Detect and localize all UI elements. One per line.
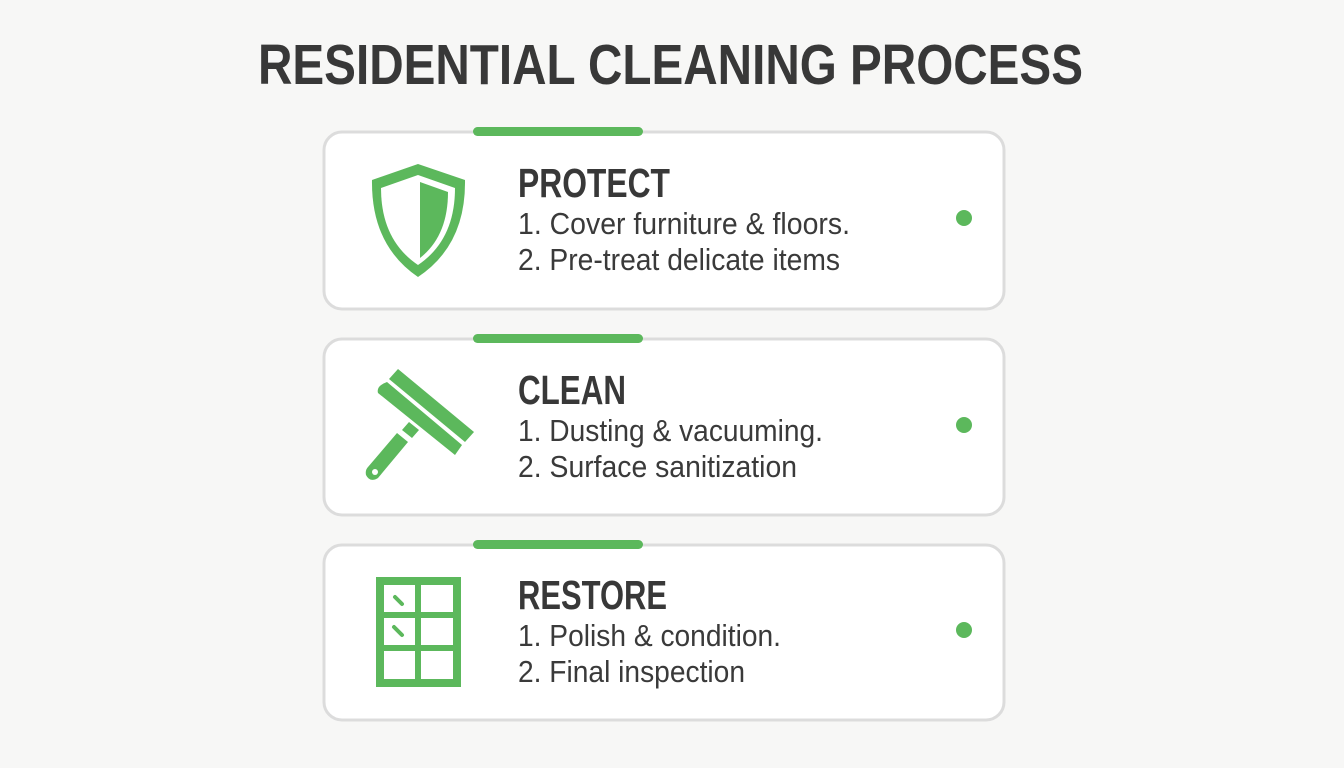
text: clean steps: 2. Surface sanitization [518,449,797,484]
panel: protect [324,127,1004,309]
heading: restore: RESTORE [518,572,667,618]
text: clean steps: 1. Dusting & vacuuming. [518,413,823,448]
heading: clean: CLEAN [518,367,626,413]
icon: shield [372,164,465,277]
text: restore steps: 2. Final inspection [518,654,745,689]
icon: window [380,581,457,683]
dot [956,417,972,433]
text: restore steps: 1. Polish & condition. [518,618,781,653]
panel: clean [324,334,1004,515]
icon: squeegee [366,369,474,480]
dot [956,622,972,638]
text: restore steps [518,618,781,689]
panel: restore [324,540,1004,720]
text: protect steps: 1. Cover furniture & floors. [518,206,850,241]
text: clean steps [518,413,823,484]
heading: protect: PROTECT [518,160,670,206]
text: protect steps [518,206,850,277]
title: RESIDENTIAL CLEANING PROCESS [258,33,1083,97]
text: protect steps: 2. Pre-treat delicate items [518,242,840,277]
dot [956,210,972,226]
